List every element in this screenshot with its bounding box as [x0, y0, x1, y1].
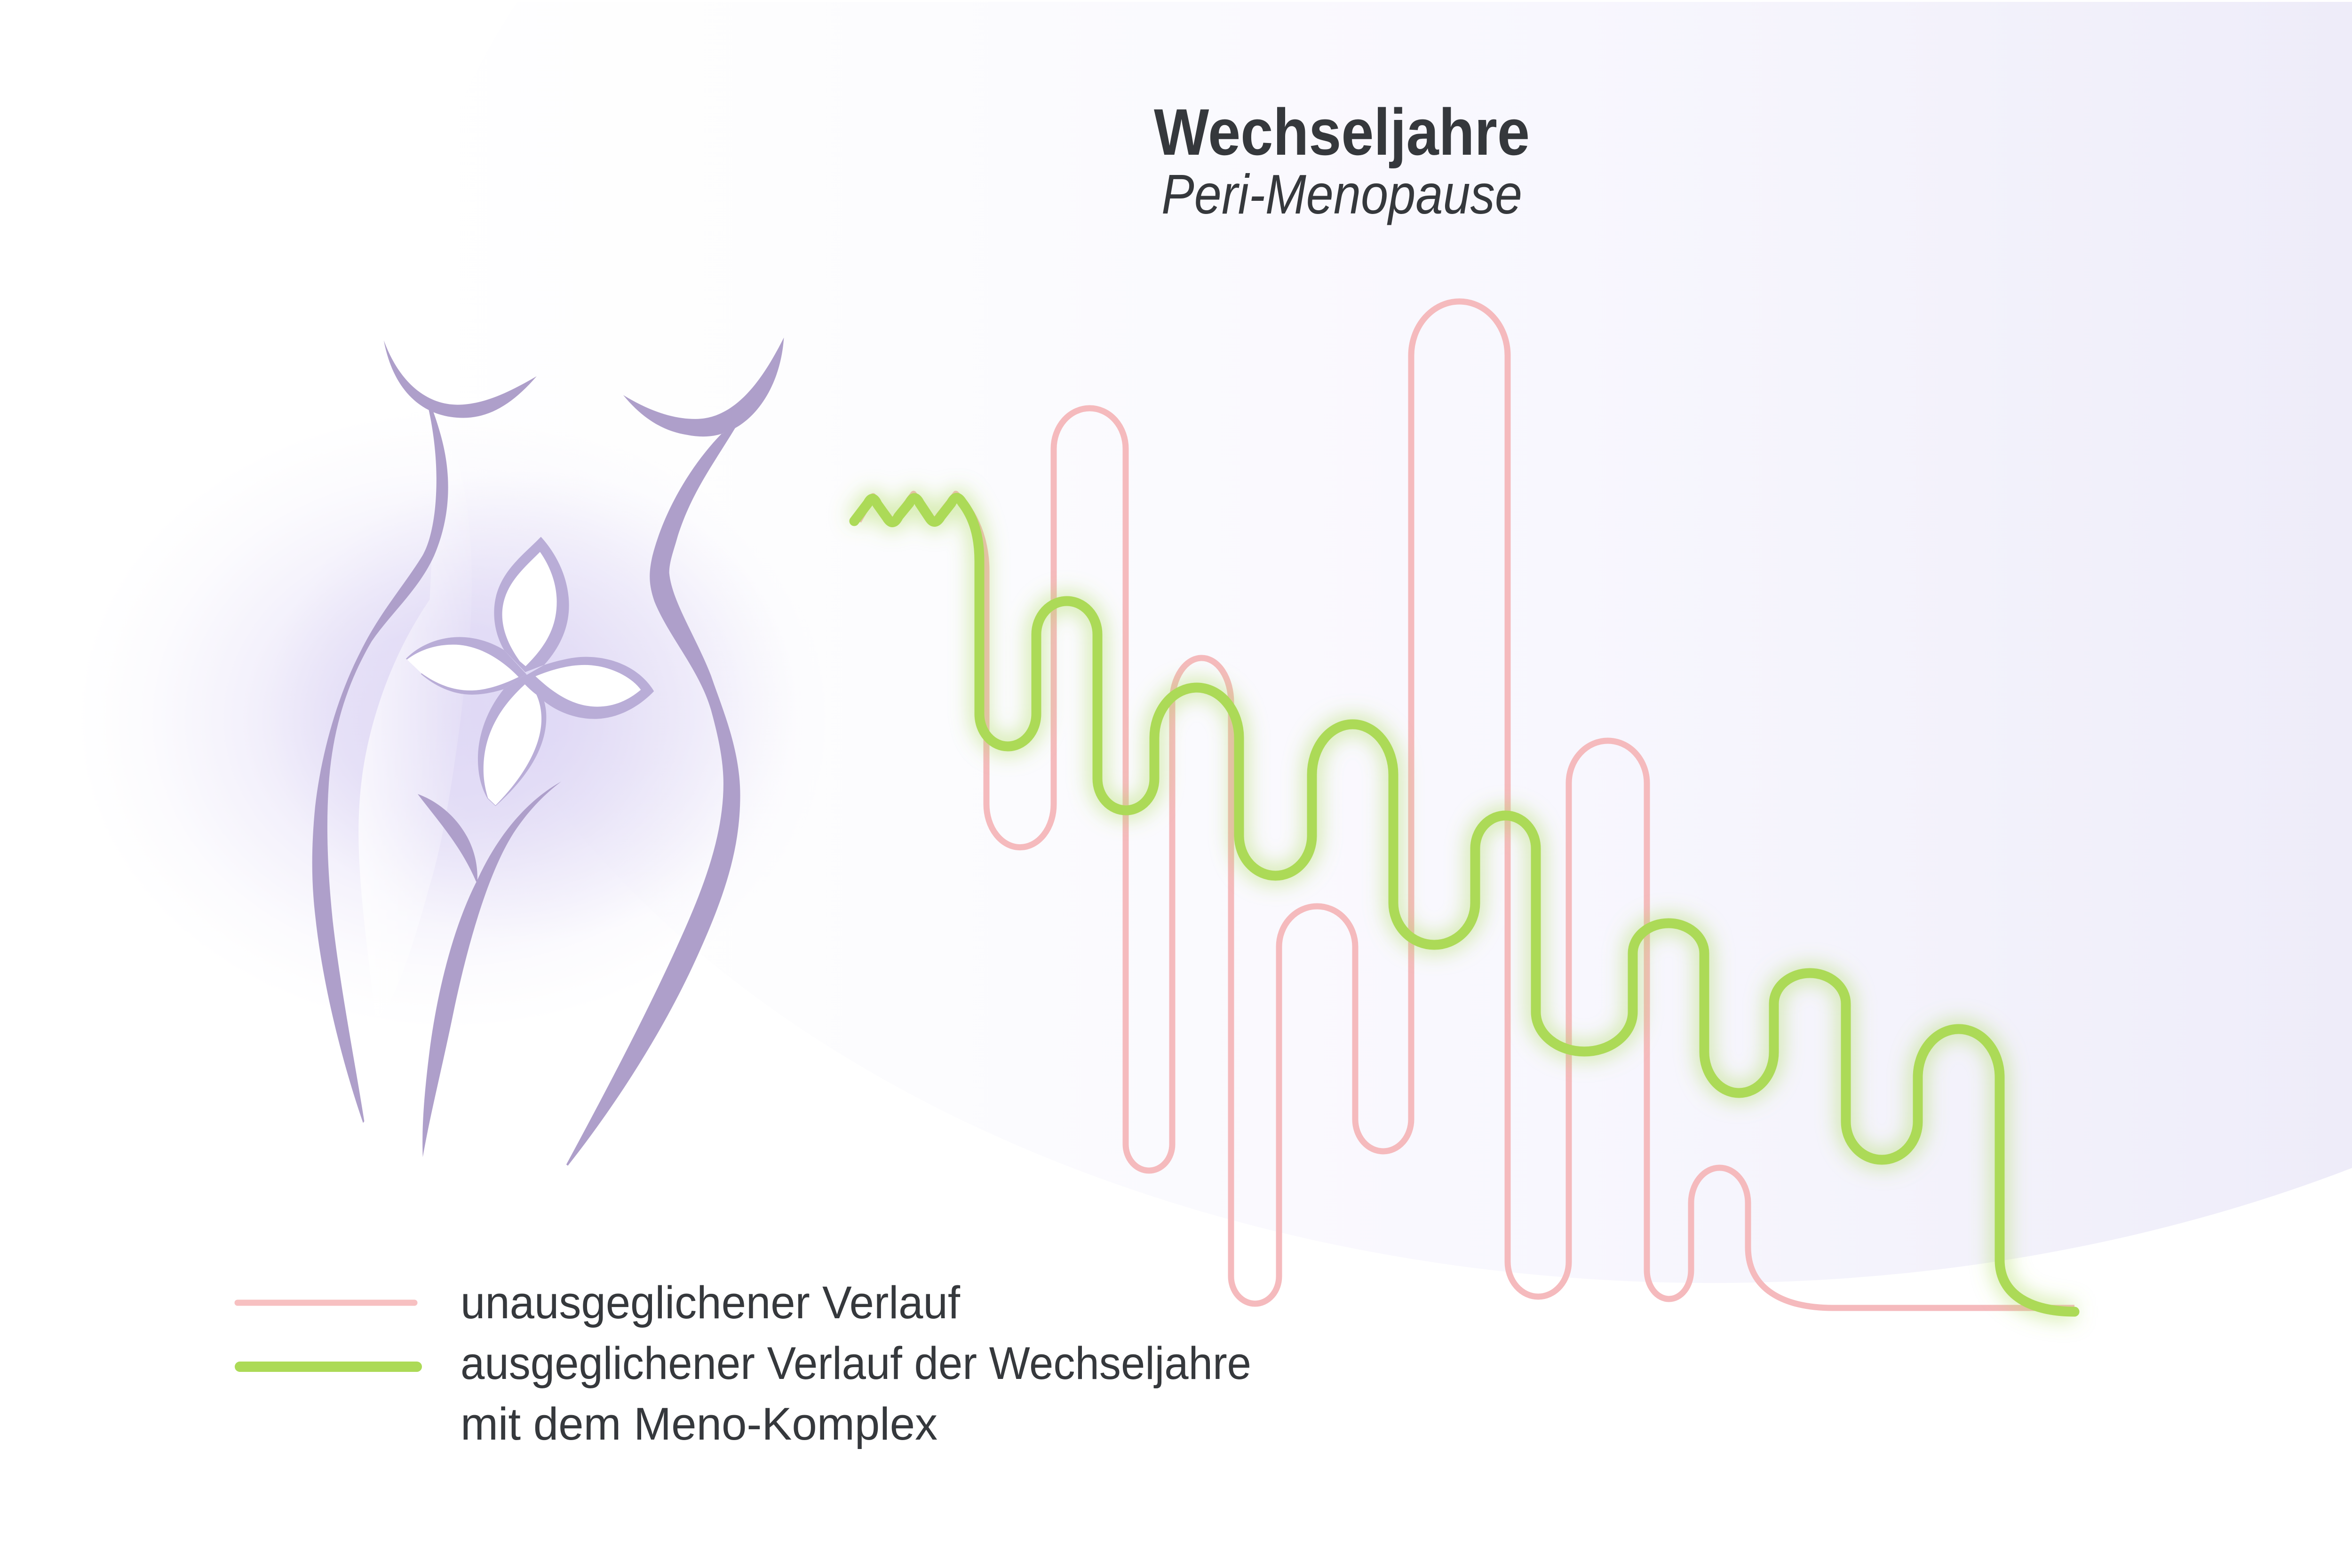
icon: four-petal flower — [406, 537, 654, 806]
white highlight swath inside torso — [358, 415, 472, 1020]
legend swatch: pink line — [238, 1300, 414, 1306]
right petal — [525, 657, 654, 719]
subtitle: Peri-Menopause — [1161, 163, 1522, 226]
legend label: balanced, line two: mit dem Meno-Komplex — [461, 1398, 938, 1449]
right torso line — [566, 428, 740, 1166]
title: Wechseljahre — [1154, 95, 1530, 169]
icon: female body silhouette — [312, 338, 784, 1166]
top petal — [494, 537, 569, 672]
bottom petal — [478, 674, 546, 806]
legend swatch: green line — [240, 1362, 417, 1372]
legend label: balanced, line one: ausgeglichener Verlauf der Wechseljahre — [461, 1338, 1251, 1389]
flower stem — [422, 782, 561, 1157]
line chart: balanced course glow (green) — [854, 498, 2074, 1312]
line chart: unbalanced course (pink) — [858, 301, 2074, 1308]
right shoulder line — [623, 338, 784, 436]
line chart: balanced course (green) — [854, 498, 2074, 1312]
lavender glow behind figure — [75, 409, 828, 1030]
legend — [238, 1277, 1251, 1449]
legend label: unbalanced: unausgeglichener Verlauf — [461, 1277, 961, 1328]
left petal — [406, 637, 526, 695]
flower leaf — [418, 794, 477, 882]
left shoulder line — [384, 341, 537, 418]
left torso line — [312, 408, 448, 1123]
